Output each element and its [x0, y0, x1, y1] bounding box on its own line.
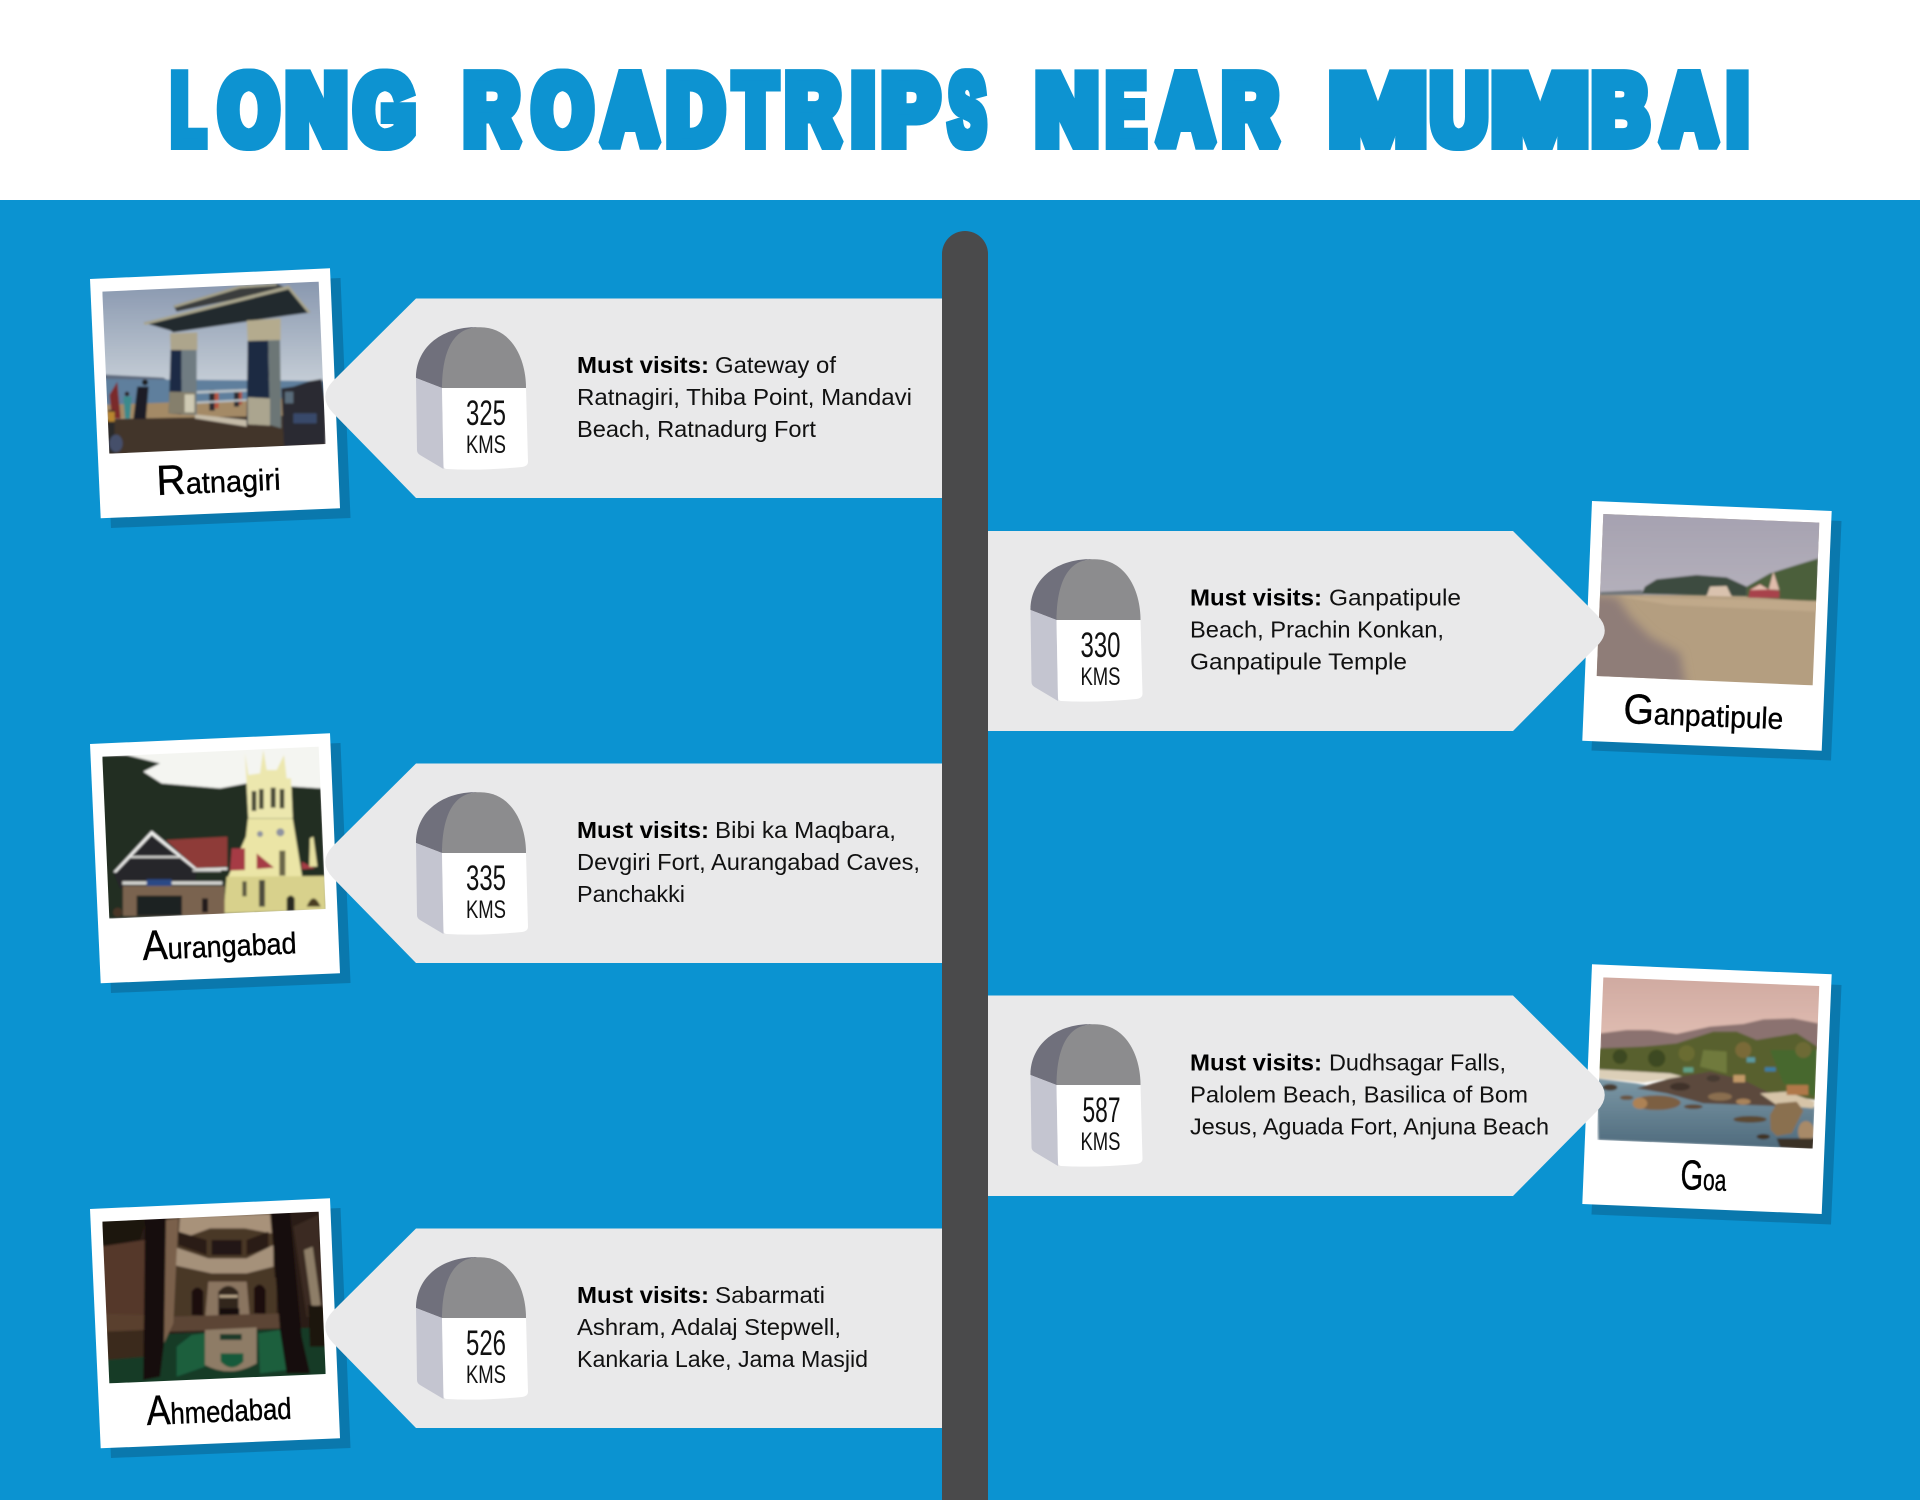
icon: milestone 325 kms [416, 327, 528, 470]
icon: milestone 587 kms: KMS [1080, 1128, 1120, 1156]
title: S [950, 54, 985, 166]
title: M [1330, 54, 1426, 166]
icon: milestone 526 kms: KMS [466, 1361, 506, 1389]
panel: Goa [988, 996, 1605, 1196]
place name: Ratnagiri: Ratnagiri [155, 452, 281, 504]
text: must visits Goa: Dudhsagar Falls, [1329, 1050, 1506, 1076]
title: O [533, 54, 592, 166]
icon: milestone 325 kms: KMS [466, 431, 506, 459]
title: R [1223, 54, 1278, 166]
icon: milestone 330 kms [1030, 559, 1142, 702]
icon: milestone 330 kms: 330 [1080, 626, 1120, 665]
place name: Goa: Goa [1680, 1151, 1728, 1200]
title: D [667, 54, 724, 166]
title: E [1107, 54, 1145, 166]
title: R [786, 54, 840, 166]
text: must visits Ratnagiri: Gateway of [715, 352, 837, 378]
polaroid: Aurangabad [90, 733, 350, 993]
text: must visits Goa [1190, 1050, 1549, 1140]
text: must visits Ahmedabad [577, 1282, 868, 1372]
polaroid: Ratnagiri [90, 268, 350, 528]
text: must visits Ganpatipule [1190, 584, 1461, 674]
title: P [882, 54, 938, 166]
icon: milestone 587 kms [1030, 1024, 1142, 1167]
header band [0, 0, 1920, 200]
icon: milestone 587 kms: 587 [1082, 1091, 1120, 1130]
text: must visits Ratnagiri: Ratnagiri, Thiba Point, Mandavi [577, 384, 912, 410]
polaroid: Ahmedabad [90, 1198, 350, 1458]
title: B [1593, 54, 1648, 166]
text: must visits Aurangabad [577, 817, 920, 907]
text: must visits Goa: Palolem Beach, Basilica of Bom [1190, 1082, 1528, 1108]
title: I [1728, 54, 1748, 166]
title: G [355, 54, 414, 166]
photo: Ahmedabad stepwell [102, 1212, 326, 1384]
text: must visits Ratnagiri: Beach, Ratnadurg Fort [577, 416, 817, 442]
polaroid: Goa [1582, 964, 1842, 1224]
title: U [1431, 54, 1487, 166]
icon: milestone 526 kms: 526 [466, 1324, 506, 1363]
title: A [1158, 54, 1213, 166]
text: must visits Ratnagiri: Must visits: [577, 352, 709, 378]
panel: Aurangabad [325, 764, 942, 963]
signpost pole [942, 231, 988, 1500]
title [172, 54, 1747, 166]
text: must visits Aurangabad: Must visits: [577, 817, 709, 843]
title: T [735, 54, 776, 166]
icon: milestone 335 kms: 335 [466, 859, 506, 898]
text: must visits Goa: Jesus, Aguada Fort, Anjuna Beach [1190, 1114, 1549, 1140]
icon: milestone 330 kms: KMS [1080, 663, 1120, 691]
photo: Aurangabad church [97, 743, 330, 923]
title: I [852, 54, 874, 166]
icon: milestone 526 kms [416, 1257, 528, 1400]
text: must visits Ahmedabad: Kankaria Lake, Jama Masjid [577, 1346, 868, 1372]
icon: milestone 335 kms: KMS [466, 896, 506, 924]
title: O [220, 54, 278, 166]
text: must visits Goa: Must visits: [1190, 1050, 1322, 1076]
place name: Ganpatipule: Ganpatipule [1623, 685, 1784, 738]
title: A [602, 54, 658, 166]
title: L [172, 54, 204, 166]
text: must visits Ganpatipule: Ganpatipule [1329, 584, 1461, 610]
photo: Ratnagiri gateway [97, 278, 330, 458]
place name: Ahmedabad: Ahmedabad [145, 1381, 292, 1434]
photo: Goa coast [1590, 973, 1827, 1150]
icon: milestone 325 kms: 325 [466, 394, 506, 433]
text: must visits Ahmedabad: Sabarmati [715, 1282, 825, 1308]
title: R [464, 54, 519, 166]
place name: Aurangabad: Aurangabad [141, 915, 297, 969]
text: must visits Aurangabad: Panchakki [577, 881, 685, 907]
photo: Ganpatipule beach [1596, 514, 1820, 686]
text: must visits Ganpatipule: Beach, Prachin Konkan, [1190, 616, 1444, 642]
title: N [1036, 54, 1098, 166]
panel: Ratnagiri [325, 298, 942, 498]
text: must visits Ratnagiri [577, 352, 912, 442]
text: must visits Ganpatipule: Must visits: [1190, 584, 1322, 610]
polaroid: Ganpatipule [1582, 501, 1842, 760]
text: must visits Aurangabad: Devgiri Fort, Aurangabad Caves, [577, 849, 920, 875]
text: must visits Aurangabad: Bibi ka Maqbara, [715, 817, 896, 843]
title: M [1492, 54, 1588, 166]
icon: milestone 335 kms [416, 792, 528, 935]
text: must visits Ahmedabad: Ashram, Adalaj Stepwell, [577, 1314, 841, 1340]
panel: Ahmedabad [325, 1228, 942, 1428]
panel: Ganpatipule [988, 531, 1605, 731]
text: must visits Ganpatipule: Ganpatipule Temple [1190, 648, 1407, 674]
title: A [1662, 54, 1717, 166]
text: must visits Ahmedabad: Must visits: [577, 1282, 709, 1308]
title: N [286, 54, 347, 166]
